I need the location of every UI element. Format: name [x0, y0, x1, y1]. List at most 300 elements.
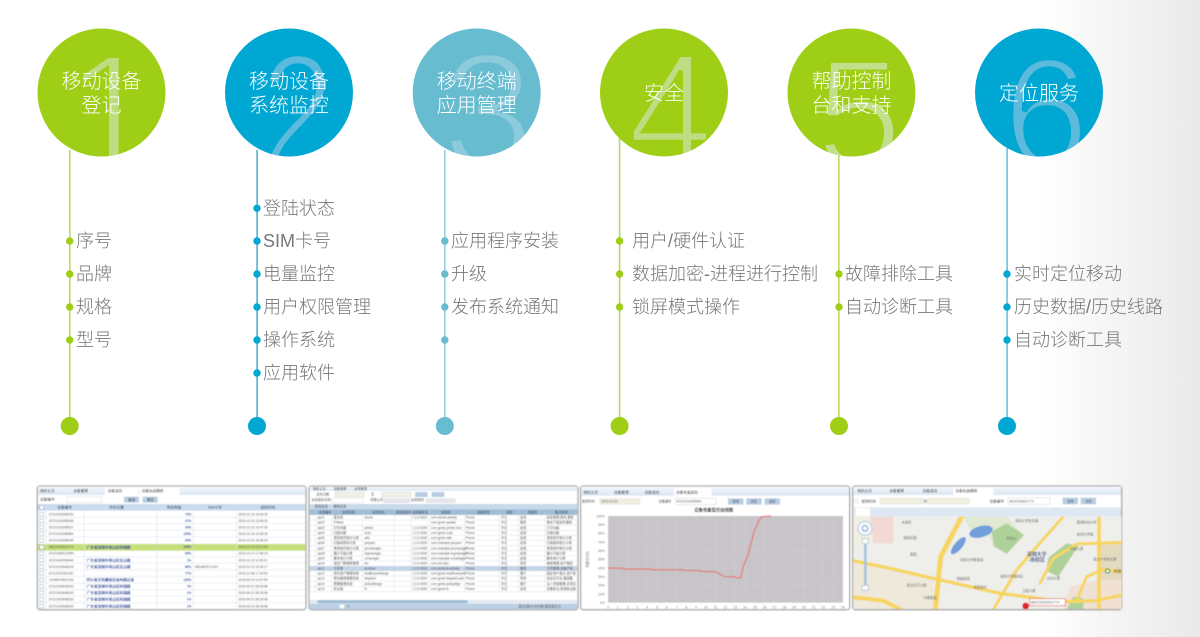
numeral 6: 6: [1003, 26, 1089, 199]
heading 5: 台和支持: [812, 94, 892, 117]
screenshot 2: application table: 应用版本名: [412, 509, 428, 514]
screenshot 2: application table: 应用: [520, 550, 526, 555]
map: 北科大厦: [1047, 575, 1061, 580]
screenshot 2: application table: 打印功能: [334, 525, 347, 530]
screenshot 2: application table: 应用: [520, 525, 526, 530]
screenshot 2: application table: 中文: [501, 525, 508, 530]
connector line 6: [1006, 148, 1008, 426]
screenshot 2: application table: 服务: [520, 520, 527, 525]
screenshot 3: battery line chart: 使用时间: [582, 498, 595, 503]
screenshot 2: application table: 所属类: [528, 509, 538, 514]
screenshot 1: device monitor table: 2015-09-22 08:28:58: [238, 604, 268, 608]
screenshot 2: application table: 订货管理,功能产品: [547, 566, 573, 571]
line chart: 0%: [600, 601, 605, 605]
line chart: 11: [714, 606, 718, 610]
circle 1: [38, 28, 166, 156]
screenshot 2: application table: ap10: [318, 561, 325, 565]
screenshot 2: application table: 应用包: [441, 509, 451, 514]
line chart: 90%: [598, 523, 605, 527]
screenshot 2: application table: 应用: [520, 535, 526, 540]
screenshot 2: application table: 常用软件统计分类: [334, 545, 360, 550]
screenshot 3: battery line chart: 我的主页: [583, 489, 598, 494]
screenshot 2: application table: 应用: [520, 530, 526, 535]
screenshot 2: application table: 1.0.0.0000: [412, 551, 427, 555]
screenshot 2: application table: dispatch: [364, 577, 376, 581]
screenshot 1: device monitor table: 85%: [185, 552, 192, 556]
screenshot 2: application table: 语言: [506, 509, 513, 514]
list 6: 历史数据/历史线路: [1014, 297, 1163, 317]
screenshot 2: application table: com.gexin.printer.func: [431, 526, 462, 530]
circle 3: [413, 28, 541, 156]
screenshot 2: application table: Phone: [466, 536, 475, 540]
connector line 4: [619, 135, 620, 426]
screenshot 2: application table: rcmanager: [364, 556, 379, 560]
column 5: help desk: [788, 27, 953, 435]
screenshot 1: device monitor table: 84%: [185, 539, 192, 543]
screenshot 2: application table: ap07: [318, 546, 325, 550]
list 1: [66, 231, 112, 350]
screenshot 1: device monitor table: 广东省深圳市南山区科园路: [87, 590, 131, 595]
line chart: 80%: [598, 532, 605, 536]
screenshot 2: application table: ap02: [318, 521, 325, 525]
connector line 3: [444, 150, 446, 426]
list 5: 故障排除工具: [845, 264, 953, 284]
screenshot 1: device monitor table: 2015-10-08 17:34:53: [238, 571, 268, 575]
screenshot 2: application table: 中文: [501, 560, 508, 565]
screenshot 1: device monitor table: 广东省深圳市南山区科园路: [87, 584, 131, 589]
screenshot 2: application table: 常用软件统计分类: [547, 535, 573, 540]
line chart: 电量百分比: [584, 550, 589, 568]
end dot 1: [61, 417, 79, 435]
line chart: 6: [666, 606, 668, 610]
screenshot 1: device monitor table: 广东省深圳市南山区科园路: [87, 597, 131, 602]
screenshot 2: application table: 应用管理: [354, 486, 368, 491]
screenshot 1: device monitor table: 电池电量: [167, 505, 182, 510]
screenshot 1: device monitor table: 2015-10-20 16:45:30: [238, 532, 268, 536]
end dot 4: [611, 417, 629, 435]
list 1: 序号: [76, 231, 112, 251]
map: 阳光华艺大厦: [907, 583, 927, 588]
list 5: 自动诊断工具: [845, 297, 953, 317]
screenshot 3: battery line chart: 清空: [751, 499, 757, 504]
end dot 6: [998, 417, 1016, 435]
screenshot 2: application table: 基本库: [334, 515, 343, 520]
screenshot 2: application table: 删除应用: [334, 504, 346, 509]
screenshot 2: application table: 银行: [520, 581, 527, 586]
screenshot 1: device monitor table: 87221442059440: [49, 558, 74, 562]
line chart: 15: [753, 606, 757, 610]
screenshot 1: device monitor table: 12345678901234: [49, 578, 74, 582]
screenshot 3: battery line chart: 2015-10-20: [601, 500, 618, 504]
screenshot 2: application table: Phone: [466, 526, 475, 530]
screenshot 2: application table: 固定资产盘点,资产库: [547, 571, 576, 576]
screenshot 2: application table: 1.0.0.0000: [412, 556, 427, 560]
list 3: 应用程序安装: [451, 231, 559, 251]
screenshot 2: application table: 显示1到15,共15条,每页显示15: [518, 604, 561, 609]
column 4: security: [600, 18, 818, 435]
map: 深圳大学: [1027, 551, 1047, 558]
screenshot 2: application table: 阅读管理,修改,更新: [547, 515, 575, 520]
screenshot 2: application table: ap14: [318, 582, 325, 586]
screenshot 1: device monitor table: 2015-10-20 16:45:29: [238, 539, 268, 543]
screenshot 2: application table: 脚本统计分类: [334, 555, 353, 560]
list 2: 登陆状态: [263, 198, 335, 218]
map: -南校区: [1028, 557, 1045, 564]
screenshot 4: location map: 使用时间: [861, 499, 876, 504]
screenshot 1: device monitor table: 1%: [187, 558, 192, 562]
screenshot 2: application table: [309, 486, 578, 610]
map: 水南花: [902, 519, 912, 524]
screenshot 2: application table: 1.0.0.0000: [412, 531, 427, 535]
screenshot 2: application table: Phone: [466, 582, 475, 586]
list 4: 用户/硬件认证: [632, 231, 745, 251]
screenshot 2: application table: ap06: [318, 541, 325, 545]
screenshot 2: application table: 中文: [501, 535, 508, 540]
screenshot 2: application table: prepare: [364, 541, 375, 545]
chart title: 设备电量监控曲线图: [694, 507, 734, 514]
line chart: 24: [841, 606, 845, 610]
column 3: app management: [413, 19, 559, 435]
map: 中地大厦: [1070, 546, 1084, 551]
screenshot 2: application table: Phone: [466, 572, 475, 576]
screenshot 2: application table: stitc: [364, 536, 370, 540]
screenshot 2: application table: Prifans: [334, 521, 344, 525]
screenshot 2: application table: ap04: [318, 531, 325, 535]
screenshot 2: application table: 应用: [520, 515, 526, 520]
numeral 3: 3: [442, 19, 534, 203]
screenshot 1: device monitor table: 1%: [187, 598, 192, 602]
screenshot 2: application table: 遥控门禁维修管理: [334, 560, 360, 565]
column 2: system monitoring: [225, 20, 371, 435]
line chart: 18: [782, 606, 786, 610]
screenshot 1: device monitor table: 清空: [147, 497, 154, 502]
screenshot 2: application table: 扫描程序统计分类: [547, 540, 573, 545]
screenshot 2: application table: 1.0.0.0000: [412, 572, 427, 576]
screenshot 2: application table: 中文: [501, 545, 508, 550]
screenshot 2: application table: 1.0.0.0001: [412, 516, 427, 520]
map: 科技山: [1007, 535, 1017, 540]
screenshot 2: application table: 中文: [501, 540, 508, 545]
list 3: [441, 231, 559, 344]
screenshot 2: application table: Phone: [466, 516, 475, 520]
map: 深圳大学南校区: [1000, 573, 1024, 578]
screenshot 2: application table: 应用名称: [342, 509, 356, 514]
screenshot 1: device monitor table: 87221429048333: [49, 591, 74, 595]
line chart: 2: [627, 606, 629, 610]
map: [853, 517, 1122, 609]
screenshot 2: application table: 扫描和程序分类: [334, 540, 357, 545]
screenshot 2: application table: Phone: [466, 561, 475, 565]
screenshot 2: application table: 中文: [501, 515, 508, 520]
screenshot 2: application table: 商务: [520, 576, 527, 581]
line chart: 0: [607, 606, 609, 610]
line chart: 8: [685, 606, 687, 610]
screenshot 2: application table: 中文: [501, 555, 508, 560]
screenshot 1: device monitor table: 87221429048333: [49, 585, 74, 589]
heading 3: 移动终端: [437, 70, 517, 93]
screenshot 2: application table: IE: [364, 587, 367, 591]
screenshot 1: device monitor table: 86221528331774: [49, 545, 74, 549]
screenshot 2: application table: 资讯资产管理系统: [334, 571, 360, 576]
screenshot 2: application table: printer: [364, 526, 373, 530]
screenshot 1: device monitor table: 2015-09-22 08:28:58: [238, 591, 268, 595]
screenshot 1: device monitor table: 2015-10-19 23:12:54: [238, 545, 268, 549]
map: 科苑: [1114, 569, 1122, 574]
screenshot 1: device monitor table: 所在位置: [109, 505, 124, 510]
screenshot 1: device monitor table: 2015-10-20 16:48:20: [238, 519, 268, 523]
line chart: 7: [676, 606, 678, 610]
screenshot 1: device monitor table: 87221516286349: [49, 539, 74, 543]
screenshot 2: application table: com.example.prcmanager: [431, 546, 467, 550]
line chart: [584, 514, 845, 610]
line chart: 30%: [598, 575, 605, 579]
screenshot 2: application table: ap12: [318, 572, 325, 576]
list 2: [253, 198, 371, 383]
line chart: 20%: [598, 584, 605, 588]
column 6: location services: [975, 26, 1163, 435]
line chart: 10: [704, 606, 708, 610]
map: 深圳大学坐东路: [1015, 518, 1039, 523]
line chart: 9: [695, 606, 697, 610]
screenshot 2: application table: ap13: [318, 577, 325, 581]
screenshot 1: device monitor table: 77%: [185, 571, 192, 575]
numeral 4: 4: [628, 18, 712, 203]
line chart: 3: [636, 606, 638, 610]
screenshot 2: application table: 应用: [520, 586, 526, 591]
screenshot 4: location map: 至: [923, 500, 927, 504]
map: 南师花园: [903, 535, 917, 540]
screenshot 2: application table: healthcareMange: [364, 572, 389, 576]
screenshot 2: application table: com.gexin.update: [431, 521, 456, 525]
screenshot 1: device monitor table: 1%: [187, 604, 192, 608]
screenshot 2: application table: com.gexin.ie: [431, 587, 449, 591]
screenshot 1: device monitor table: SIM卡号: [208, 505, 222, 510]
screenshot 2: application table: 发布日期: [316, 492, 329, 497]
screenshot 2: application table: ap11: [318, 567, 325, 571]
list 5: [835, 264, 953, 317]
screenshot 1: device monitor table: 广东省深圳市南山区后山路: [87, 564, 131, 569]
line chart: 1: [617, 606, 619, 610]
screenshot 2: application table: 扫描功能: [334, 530, 347, 535]
screenshot 2: application table: 1.0.0.0000: [412, 561, 427, 565]
screenshot 2: application table: 维修管理,资产路线: [547, 560, 574, 565]
screenshot 2: application table: 应用: [520, 555, 526, 560]
screenshot 2: application table: 应用: [520, 540, 526, 545]
screenshot 1: device monitor table: 2015-10-20 16:49:25: [238, 512, 268, 516]
screenshot 2: application table: 1.0.0.0000: [412, 526, 427, 530]
numeral 2: 2: [261, 20, 334, 204]
screenshot 2: application table: 应用包名: [372, 509, 385, 514]
screenshot 2: application table: Phone: [466, 587, 475, 591]
screenshot 1: device monitor table: 设备编号: [57, 505, 72, 510]
screenshot 2: application table: 打印功能: [547, 525, 560, 530]
circle 4: [600, 28, 728, 156]
screenshot 1: device monitor table: 86%: [185, 565, 192, 569]
screenshot 3: battery line chart: 87221516285854: [677, 500, 701, 504]
end dot 5: [830, 417, 848, 435]
screenshot 2: application table: 展示平板分类: [547, 550, 566, 555]
screenshot 1: device monitor table: 设备编号:: [40, 497, 56, 502]
line chart: 10%: [598, 592, 605, 596]
line chart: 100%: [596, 514, 605, 518]
screenshot 2: application table: 1.0.0.0000: [412, 541, 427, 545]
screenshot 2: application table: 订货单: [334, 566, 343, 571]
map: 86221528331774: [1031, 601, 1059, 605]
screenshot 2: application table: com.irtc.irtsu: [431, 561, 449, 565]
screenshot 2: application table: 中文: [501, 576, 508, 581]
screenshot 2: application table: 1.0.0.0000: [412, 587, 427, 591]
screenshot 2: application table: 法人举报管理,多项目: [547, 581, 576, 586]
screenshot 1: device monitor table: 2015-09-22 08:28:58: [238, 598, 268, 602]
screenshot 2: application table: Phone: [466, 577, 475, 581]
screenshot 1: device monitor table: +8618876711497: [194, 565, 219, 569]
screenshot 4: location map: 设备管理: [889, 488, 904, 493]
screenshot 1: device monitor table: 广东省深圳市南山区科园路: [87, 603, 131, 608]
line chart: 14: [743, 606, 747, 610]
screenshot 2: application table: 我的主页: [313, 486, 326, 491]
screenshot 2: application table: ap08: [318, 551, 325, 555]
screenshot 2: application table: com.gexin.policyMge: [431, 582, 461, 586]
list 3: 发布系统通知: [451, 297, 559, 317]
screenshot 2: application table: 中文: [501, 571, 508, 576]
screenshot 2: application table: com.example.rcmanager: [431, 556, 466, 560]
map: 博雅西苑: [957, 576, 971, 581]
screenshot 1: device monitor table: 设备轨迹跟踪: [142, 488, 164, 493]
screenshot 2: application table: Phone: [466, 531, 475, 535]
screenshot 1: device monitor table: [37, 486, 306, 610]
heading 6: 定位服务: [999, 82, 1079, 105]
list 2: 用户权限管理: [263, 297, 371, 317]
screenshot 3: battery line chart: 返回: [769, 499, 775, 504]
screenshot 2: application table: 中文: [501, 530, 508, 535]
screenshot 2: application table: com.example.prepare: [431, 541, 462, 545]
screenshot 2: application table: 应用版本号: [396, 509, 411, 514]
map: 泰园: [910, 551, 917, 556]
line chart: 12: [723, 606, 727, 610]
screenshot 2: application table: 1.0.0.0000: [412, 536, 427, 540]
screenshot 1: device monitor table: 87221429048333: [49, 598, 74, 602]
map: 深圳大学南: [1077, 531, 1094, 536]
line chart: 21: [812, 606, 816, 610]
screenshot 1: device monitor table: 87221516285854: [49, 532, 74, 536]
screenshot 2: application table: 至: [371, 493, 374, 497]
screenshot 2: application table: com.gexin.healthcarepM: [431, 572, 466, 576]
line chart: 23: [831, 606, 835, 610]
screenshot 1: device monitor table: 设备管理: [73, 488, 88, 493]
map: 鸿葛新村: [973, 585, 987, 590]
numeral 1: 1: [65, 20, 157, 204]
screenshot 2: application table: 设备类型: [477, 509, 490, 514]
screenshot 1: device monitor table: 广东省深圳市南山区后山路: [87, 557, 131, 562]
screenshot 1: device monitor table: 87221522301152: [49, 571, 74, 575]
map: 香港科技大学: [1077, 519, 1097, 524]
list 4: 数据加密-进程进行控制: [632, 264, 818, 284]
screenshot 2: application table: 发展执法,现场执法局: [547, 586, 576, 591]
map: 南大产学研大厦: [1093, 557, 1117, 562]
screenshot 2: application table: 所属公司:: [370, 497, 384, 502]
end dot 3: [436, 417, 454, 435]
line chart: 50%: [598, 558, 605, 562]
screenshot 2: application table: 中文: [501, 550, 508, 555]
screenshot 2: application table: ebook: [364, 516, 373, 520]
line chart: 60%: [598, 549, 605, 553]
list 2: 应用软件: [263, 363, 335, 383]
map: 深圳大学覆道站: [960, 557, 984, 562]
screenshot 2: application table: com.ebook.activity: [431, 516, 457, 520]
screenshot 2: application table: 新增应用: [315, 504, 328, 509]
screenshot 2: application table: 策略管理系统: [334, 581, 353, 586]
heading 2: 移动设备: [249, 70, 329, 93]
screenshot 2: application table: Phone: [466, 521, 475, 525]
screenshot 1: device monitor table: 2015-10-15 11:36:32: [238, 558, 268, 562]
connector line 1: [69, 150, 71, 426]
screenshot 2: application table: Phone: [466, 567, 475, 571]
line chart: 19: [792, 606, 796, 610]
screenshot 1: device monitor table: 四川省甘孜藏族自治州路达县: [87, 577, 135, 582]
list 6: 实时定位移动: [1014, 264, 1122, 284]
screenshot 2: application table: 应用类别:: [411, 497, 425, 502]
screenshot 2: application table: com.gexin.stitc: [431, 536, 452, 540]
line chart: 70%: [598, 540, 605, 544]
screenshot 1: device monitor table: 87221516285700: [49, 512, 74, 516]
end dot 2: [248, 417, 266, 435]
screenshot 4: location map: 设备编号:: [989, 499, 1005, 504]
screenshot 2: application table: ap03: [318, 526, 325, 530]
line chart: 16: [763, 606, 767, 610]
line chart: 22: [821, 606, 825, 610]
line chart: 17: [772, 606, 776, 610]
screenshot 2: application table: 扫描功能: [547, 530, 560, 535]
screenshot 2: application table: ap01: [318, 516, 325, 520]
connector line 2: [256, 150, 258, 426]
screenshot 1: device monitor table: 100%: [183, 532, 192, 536]
connector line 5: [838, 150, 840, 426]
screenshot 1: device monitor table: 1%: [187, 591, 192, 595]
screenshot 2: application table: 执法局: [334, 586, 343, 591]
screenshot 1: device monitor table: 87221429048333: [49, 604, 74, 608]
line chart: 4: [646, 606, 648, 610]
heading 3: 应用管理: [437, 94, 517, 117]
screenshot 2: application table: 中文: [501, 520, 508, 525]
screenshot 2: application table: 中文: [501, 566, 508, 571]
screenshot 2: application table: Phone: [466, 546, 475, 550]
screenshot 1: device monitor table: 75%: [185, 512, 192, 516]
screenshot 2: application table: irtc: [364, 561, 369, 565]
screenshot 3: battery line chart: 设备电量监控: [676, 489, 698, 494]
screenshot 2: application table: ap05: [318, 536, 325, 540]
screenshot 4: location map: 设备监控: [923, 488, 938, 493]
screenshot 2: application table: 1.0.0.0000: [412, 546, 427, 550]
screenshot 1: device monitor table: 2015-10-17 17:56:14: [238, 552, 268, 556]
list 1: 型号: [76, 330, 112, 350]
map: 汽車新园: [923, 595, 937, 600]
screenshot 2: application table: 中文: [501, 586, 508, 591]
heading 4: 安全: [644, 82, 684, 105]
screenshot 2: application table: 脚本统计分类: [547, 555, 566, 560]
screenshot 1: device monitor table: 2015-10-12 15:26:17: [238, 565, 268, 569]
screenshot 2: application table: ap15: [318, 587, 325, 591]
screenshot 1: device monitor table: 2015-09-29 14:57:55: [238, 578, 268, 582]
screenshot 2: application table: 备注说明: [555, 509, 568, 514]
screenshot 2: application table: 推送下载及时通知: [547, 520, 572, 525]
screenshot 2: application table: 移动维修管理系统: [334, 576, 360, 581]
screenshot 1: device monitor table: 监控时间: [261, 505, 276, 510]
screenshot 2: application table: Phone: [466, 541, 475, 545]
list 2: SIM卡号: [263, 231, 331, 251]
screenshot 2: application table: policyMange: [364, 582, 382, 586]
screenshot 2: application table: ap09: [318, 556, 325, 560]
circle 5: [788, 28, 916, 156]
